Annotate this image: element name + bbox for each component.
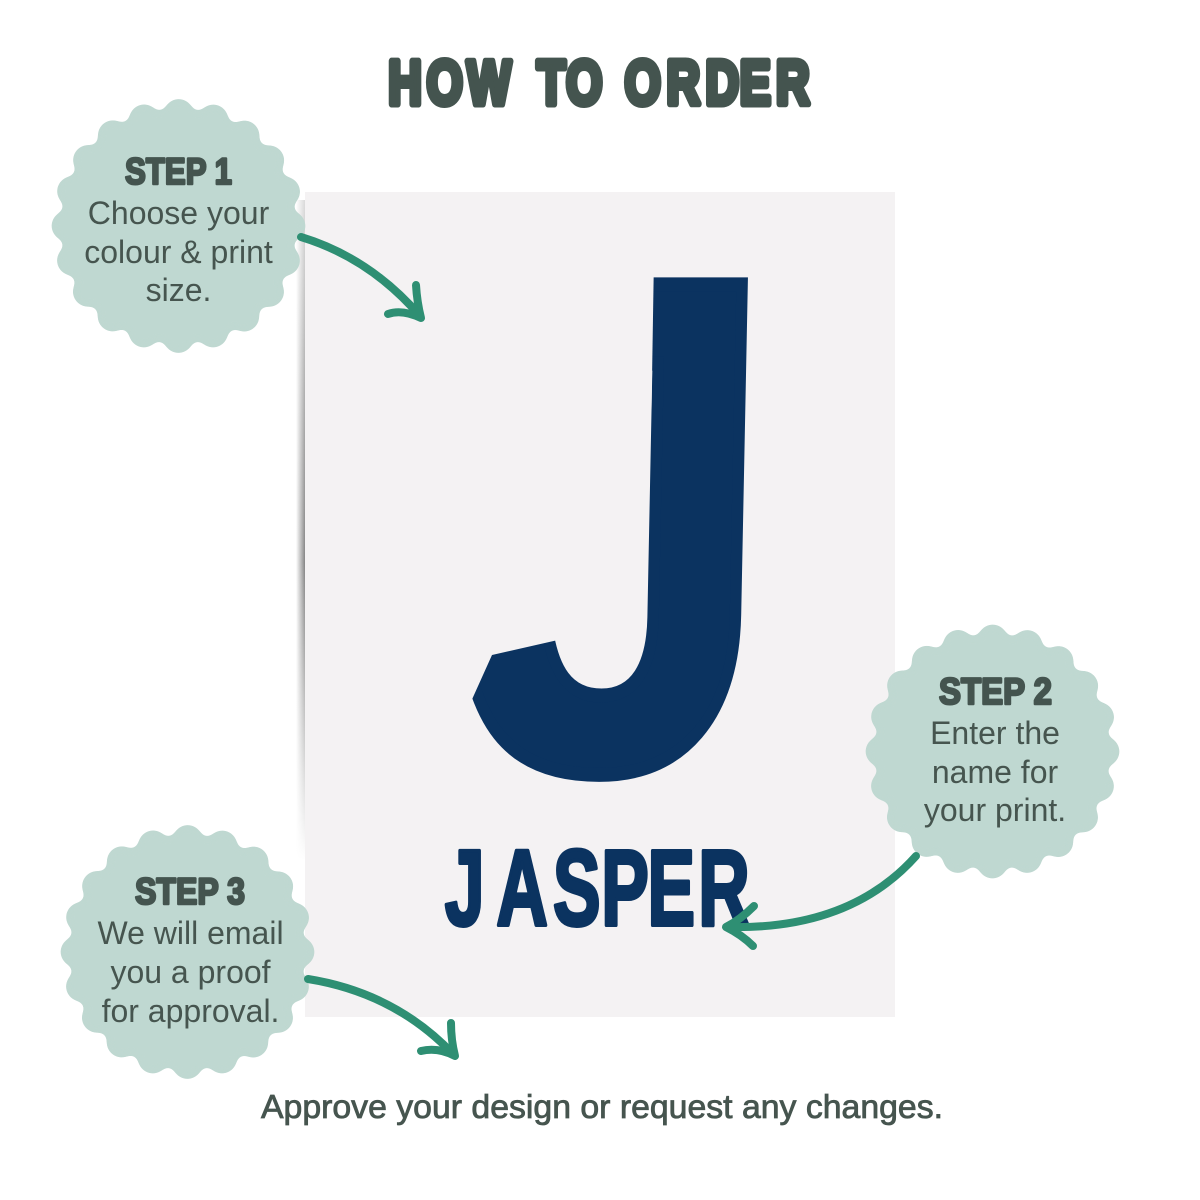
closing note: Approve your design or request any changes. xyxy=(261,1088,943,1125)
step heading: STEP 1 xyxy=(125,151,232,192)
arrow: step 3 to approval xyxy=(308,979,455,1056)
step text: We will email xyxy=(97,915,284,951)
name JASPER: JASPER xyxy=(445,828,750,949)
panel: step 1 xyxy=(62,109,296,343)
badge xyxy=(62,109,296,343)
step text: size. xyxy=(146,272,211,308)
panel: step 3 xyxy=(70,835,304,1069)
step text: Choose your xyxy=(88,195,270,231)
step text: name for xyxy=(932,754,1058,790)
arrow: step 2 to name xyxy=(726,856,916,946)
step text: you a proof xyxy=(110,954,271,990)
large initial J: J xyxy=(450,132,784,917)
step text: Enter the xyxy=(930,715,1060,751)
title: HOW TO ORDER xyxy=(388,47,810,118)
arrow: step 1 to print xyxy=(301,237,421,318)
step text: your print. xyxy=(924,792,1066,828)
step heading: STEP 2 xyxy=(939,671,1052,712)
badge xyxy=(876,634,1110,868)
panel: step 2 xyxy=(876,634,1110,868)
step text: for approval. xyxy=(102,993,279,1029)
badge xyxy=(70,835,304,1069)
print shadow xyxy=(296,200,305,860)
step heading: STEP 3 xyxy=(135,871,245,912)
print sheet xyxy=(305,192,895,1017)
panel: print preview xyxy=(296,132,895,1017)
step text: colour & print xyxy=(84,234,273,270)
